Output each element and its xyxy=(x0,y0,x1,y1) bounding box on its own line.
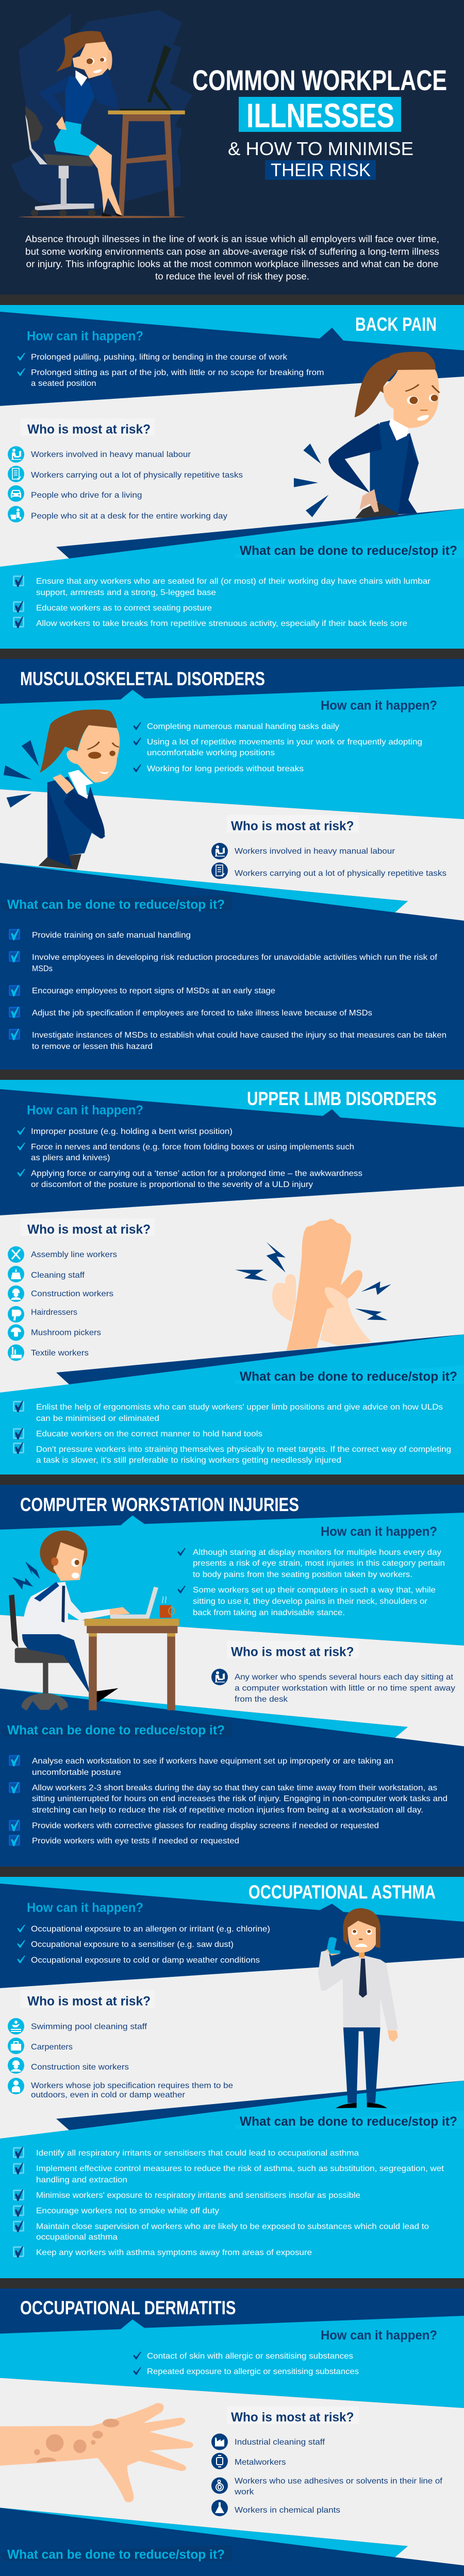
how can it happen: Prolonged sitting as part of the job, with little or no scope for breaking from xyxy=(31,368,324,377)
icon: adhesive tape xyxy=(211,2477,228,2494)
what can be done xyxy=(7,897,446,1051)
how can it happen xyxy=(133,2328,437,2376)
who is most at risk: work xyxy=(234,2487,255,2497)
what can be done: sitting uninterrupted for hours on end increases the risk of injury. Engaging in non-computer work tasks and xyxy=(32,1794,448,1803)
what can be done: Encourage workers not to smoke while off duty xyxy=(36,2207,219,2215)
who is most at risk: Workers carrying out a lot of physically repetitive tasks xyxy=(31,471,243,480)
panel: musculoskeletal disorders xyxy=(0,659,464,1070)
what can be done: Minimise workers' exposure to respiratory irritants and sensitisers insofar as possible xyxy=(36,2191,360,2200)
how can it happen: Repeated exposure to allergic or sensitising substances xyxy=(147,2367,359,2376)
what can be done: Ensure that any workers who are seated for all (or most) of their working day have chairs with lumbar xyxy=(36,577,431,586)
what can be done: Implement effective control measures to reduce the risk of asthma, such as substitution, segregation, wet xyxy=(36,2164,444,2173)
panel: occupational asthma xyxy=(0,1877,464,2278)
what can be done: uncomfortable posture xyxy=(32,1768,121,1777)
heading: COMPUTER WORKSTATION INJURIES xyxy=(20,1494,299,1515)
icon: checklist xyxy=(211,862,228,879)
icon: checklist xyxy=(8,466,24,482)
icon: mushroom xyxy=(8,1324,24,1341)
who is most at risk: Who is most at risk? xyxy=(231,2410,354,2425)
icon: metal tool xyxy=(211,2453,228,2469)
heading: BACK PAIN xyxy=(355,314,437,335)
who is most at risk: Swimming pool cleaning staff xyxy=(31,2023,147,2031)
title: & HOW TO MINIMISE xyxy=(228,138,413,159)
who is most at risk: Workers involved in heavy manual labour xyxy=(235,847,395,856)
who is most at risk: Any worker who spends several hours each day sitting at xyxy=(235,1673,454,1682)
panel: computer workstation injuries xyxy=(0,1485,464,1867)
icon: hair dryer xyxy=(8,1306,24,1323)
how can it happen: Occupational exposure to cold or damp weather conditions xyxy=(31,1956,260,1965)
who is most at risk: outdoors, even in cold or damp weather xyxy=(31,2091,186,2099)
who is most at risk: Construction site workers xyxy=(31,2063,129,2072)
what can be done: Identify all respiratory irritants or sensitisers that could lead to occupational asthma xyxy=(36,2149,359,2158)
who is most at risk: Who is most at risk? xyxy=(231,1645,354,1659)
who is most at risk: Construction workers xyxy=(31,1290,113,1298)
background shards xyxy=(11,10,192,211)
how can it happen xyxy=(17,1103,362,1189)
what can be done: Allow workers to take breaks from repetitive strenuous activity, especially if their back feels sore xyxy=(36,619,407,628)
who is most at risk: Who is most at risk? xyxy=(27,1222,151,1236)
what can be done: Encourage employees to report signs of MSDs at an early stage xyxy=(32,987,275,995)
illustration: hand with skin rash xyxy=(0,2403,193,2502)
intro paragraph: but some working environments can pose an above-average risk of suffering a long-term illness xyxy=(25,246,439,257)
icon: construction worker xyxy=(8,1285,24,1302)
what can be done: What can be done to reduce/stop it? xyxy=(240,2114,457,2129)
what can be done: occupational asthma xyxy=(36,2233,118,2242)
what can be done: Keep any workers with asthma symptoms away from areas of exposure xyxy=(36,2248,312,2257)
how can it happen xyxy=(177,1524,445,1617)
how can it happen: to body pains from the seating position taken by workers. xyxy=(193,1570,412,1579)
what can be done xyxy=(7,1723,448,1846)
what can be done: Provide workers with corrective glasses for reading display screens if needed or requested xyxy=(32,1822,379,1830)
what can be done: stretching can help to reduce the risk of repetitive motion injuries from being at a workstation all day. xyxy=(32,1806,423,1815)
what can be done xyxy=(13,544,457,628)
what can be done: What can be done to reduce/stop it? xyxy=(240,1369,457,1384)
icon: desk worker xyxy=(211,843,228,859)
how can it happen: How can it happen? xyxy=(27,1103,143,1117)
who is most at risk: People who drive for a living xyxy=(31,491,142,500)
icon: toolbox xyxy=(8,2038,24,2054)
who is most at risk xyxy=(8,418,243,522)
title: THEIR RISK xyxy=(271,160,371,180)
icon: construction worker xyxy=(8,2057,24,2074)
who is most at risk: Workers in chemical plants xyxy=(235,2506,340,2515)
heading: OCCUPATIONAL DERMATITIS xyxy=(20,2297,236,2318)
who is most at risk: Carpenters xyxy=(31,2043,73,2052)
who is most at risk: Workers who use adhesives or solvents in their line of xyxy=(235,2477,443,2485)
icon: desk worker xyxy=(8,446,24,463)
what can be done: can be minimised or eliminated xyxy=(36,1414,159,1423)
who is most at risk xyxy=(211,2406,443,2516)
who is most at risk xyxy=(8,1218,155,1361)
how can it happen: uncomfortable working positions xyxy=(147,749,275,757)
how can it happen: Prolonged pulling, pushing, lifting or bending in the course of work xyxy=(31,353,288,362)
who is most at risk xyxy=(8,1990,233,2099)
how can it happen: Applying force or carrying out a ‘tense’ action for a prolonged time – the awkwardness xyxy=(31,1170,362,1178)
what can be done: Don't pressure workers into straining themselves physically to meet targets. If the correct way of completing xyxy=(36,1445,451,1454)
how can it happen: Contact of skin with allergic or sensitising substances xyxy=(147,2352,353,2361)
how can it happen xyxy=(133,699,437,773)
how can it happen: Completing numerous manual handing tasks daily xyxy=(147,722,339,731)
illustration: woman with back pain xyxy=(294,352,439,518)
how can it happen xyxy=(17,329,324,388)
icon: desk xyxy=(8,506,24,522)
how can it happen: Force in nerves and tendons (e.g. force from folding boxes or using implements such xyxy=(31,1143,354,1151)
what can be done: Involve employees in developing risk reduction procedures for unavoidable activities which run the risk of xyxy=(32,953,438,962)
title xyxy=(192,64,447,180)
icon: textile factory xyxy=(8,1345,24,1361)
icon: outdoor worker xyxy=(8,2078,24,2094)
how can it happen: Occupational exposure to an allergen or irritant (e.g. chlorine) xyxy=(31,1925,270,1934)
how can it happen: Using a lot of repetitive movements in your work or frequently adopting xyxy=(147,738,422,747)
what can be done: What can be done to reduce/stop it? xyxy=(240,544,457,558)
what can be done: handling and extraction xyxy=(36,2176,127,2184)
how can it happen: as pliers and knives) xyxy=(31,1154,110,1162)
what can be done xyxy=(13,2114,457,2258)
how can it happen: How can it happen? xyxy=(321,2328,437,2343)
who is most at risk: Workers whose job specification requires them to be xyxy=(31,2081,233,2090)
how can it happen: Improper posture (e.g. holding a bent wrist position) xyxy=(31,1127,233,1136)
how can it happen: presents a risk of eye strain, most injuries in this category pertain xyxy=(193,1559,445,1568)
what can be done: a task is slower, it's still preferable to risking workers getting needlessly injured xyxy=(36,1456,341,1465)
illustration: woman at desk xyxy=(19,31,185,218)
how can it happen: How can it happen? xyxy=(27,329,143,343)
how can it happen: Although staring at display monitors for multiple hours every day xyxy=(193,1548,441,1557)
illustration: hand and wrist pain xyxy=(235,1219,391,1351)
what can be done: What can be done to reduce/stop it? xyxy=(7,1723,225,1737)
illustration: worker at laptop xyxy=(9,1531,179,1711)
intro paragraph: or injury. This infographic looks at the most common workplace illnesses and what can be done xyxy=(26,259,438,269)
what can be done: Provide training on safe manual handling xyxy=(32,931,191,940)
heading: MUSCULOSKELETAL DISORDERS xyxy=(20,668,265,689)
how can it happen: Occupational exposure to a sensitiser (e.g. saw dust) xyxy=(31,1940,234,1949)
what can be done: Maintain close supervision of workers who are likely to be exposed to substances which could lead to xyxy=(36,2223,429,2231)
who is most at risk: Workers involved in heavy manual labour xyxy=(31,450,191,459)
who is most at risk: Who is most at risk? xyxy=(27,1994,151,2008)
illustration: woman with shoulder pain xyxy=(4,709,120,870)
what can be done: Educate workers as to correct seating posture xyxy=(36,604,212,613)
how can it happen: sitting to use it, they develop pains in their neck, shoulders or xyxy=(193,1597,428,1606)
who is most at risk: Mushroom pickers xyxy=(31,1328,101,1337)
how can it happen: a seated position xyxy=(31,379,96,388)
what can be done: support, armrests and a strong, 5-legged base xyxy=(36,588,216,597)
who is most at risk: Textile workers xyxy=(31,1349,89,1358)
icon: car xyxy=(8,485,24,502)
panel: header xyxy=(0,0,464,295)
what can be done: Analyse each workstation to see if workers have equipment set up improperly or are taking an xyxy=(32,1757,393,1766)
what can be done: Provide workers with eye tests if needed or requested xyxy=(32,1837,239,1845)
what can be done: What can be done to reduce/stop it? xyxy=(7,897,225,912)
title: ILLNESSES xyxy=(246,96,394,134)
icon: desk worker xyxy=(211,1669,228,1685)
who is most at risk: from the desk xyxy=(235,1695,288,1704)
icon: cleaning xyxy=(8,1266,24,1282)
how can it happen: How can it happen? xyxy=(321,699,437,713)
what can be done: Educate workers on the correct manner to hold hand tools xyxy=(36,1430,262,1438)
panel: back pain xyxy=(0,305,464,649)
intro paragraph: to reduce the level of risk they pose. xyxy=(155,271,309,281)
what can be done: to remove or lessen this hazard xyxy=(32,1042,153,1051)
who is most at risk xyxy=(211,1641,455,1704)
who is most at risk: Hairdressers xyxy=(31,1308,77,1317)
who is most at risk: a computer workstation with little or no time spent away xyxy=(235,1684,455,1693)
how can it happen: How can it happen? xyxy=(27,1901,143,1915)
how can it happen: Some workers set up their computers in such a way that, while xyxy=(193,1586,436,1595)
intro paragraph: Absence through illnesses in the line of work is an issue which all employers will face over time, xyxy=(25,234,439,244)
icon: chemical flask xyxy=(211,2500,228,2516)
icon: factory xyxy=(211,2434,228,2450)
who is most at risk: Metalworkers xyxy=(235,2458,286,2467)
how can it happen xyxy=(17,1901,270,1965)
what can be done: What can be done to reduce/stop it? xyxy=(7,2547,225,2562)
what can be done: Adjust the job specification if employees are forced to take illness leave because of MSDs xyxy=(32,1009,372,1018)
panel: upper limb disorders xyxy=(0,1080,464,1475)
who is most at risk: People who sit at a desk for the entire working day xyxy=(31,512,227,520)
illustration: man with inhaler xyxy=(318,1908,398,2108)
how can it happen: or discomfort of the posture is proportional to the severity of a ULD injury xyxy=(31,1180,313,1189)
what can be done: Enlist the help of ergonomists who can study workers' upper limb positions and give advice on how ULDs xyxy=(36,1403,443,1412)
who is most at risk: Assembly line workers xyxy=(31,1250,117,1259)
who is most at risk: Industrial cleaning staff xyxy=(235,2438,325,2447)
what can be done: MSDs xyxy=(32,964,53,973)
icon: swimmer xyxy=(8,2018,24,2035)
who is most at risk: Who is most at risk? xyxy=(27,422,151,437)
who is most at risk: Who is most at risk? xyxy=(231,819,354,834)
who is most at risk: Cleaning staff xyxy=(31,1271,85,1280)
how can it happen: How can it happen? xyxy=(321,1524,437,1539)
who is most at risk xyxy=(211,815,446,879)
what can be done: Allow workers 2-3 short breaks during the day so that they can take time away from their workstation, as xyxy=(32,1784,437,1792)
how can it happen: Working for long periods without breaks xyxy=(147,765,304,773)
who is most at risk: Workers carrying out a lot of physically repetitive tasks xyxy=(235,869,446,878)
what can be done: Investigate instances of MSDs to establish what could have caused the injury so that measures can be taken xyxy=(32,1031,446,1040)
intro paragraph xyxy=(25,234,439,281)
how can it happen: back from taking an inadvisable stance. xyxy=(193,1608,345,1617)
icon: tools xyxy=(8,1246,24,1263)
panel: occupational dermatitis xyxy=(0,2289,464,2576)
what can be done xyxy=(13,1369,457,1465)
